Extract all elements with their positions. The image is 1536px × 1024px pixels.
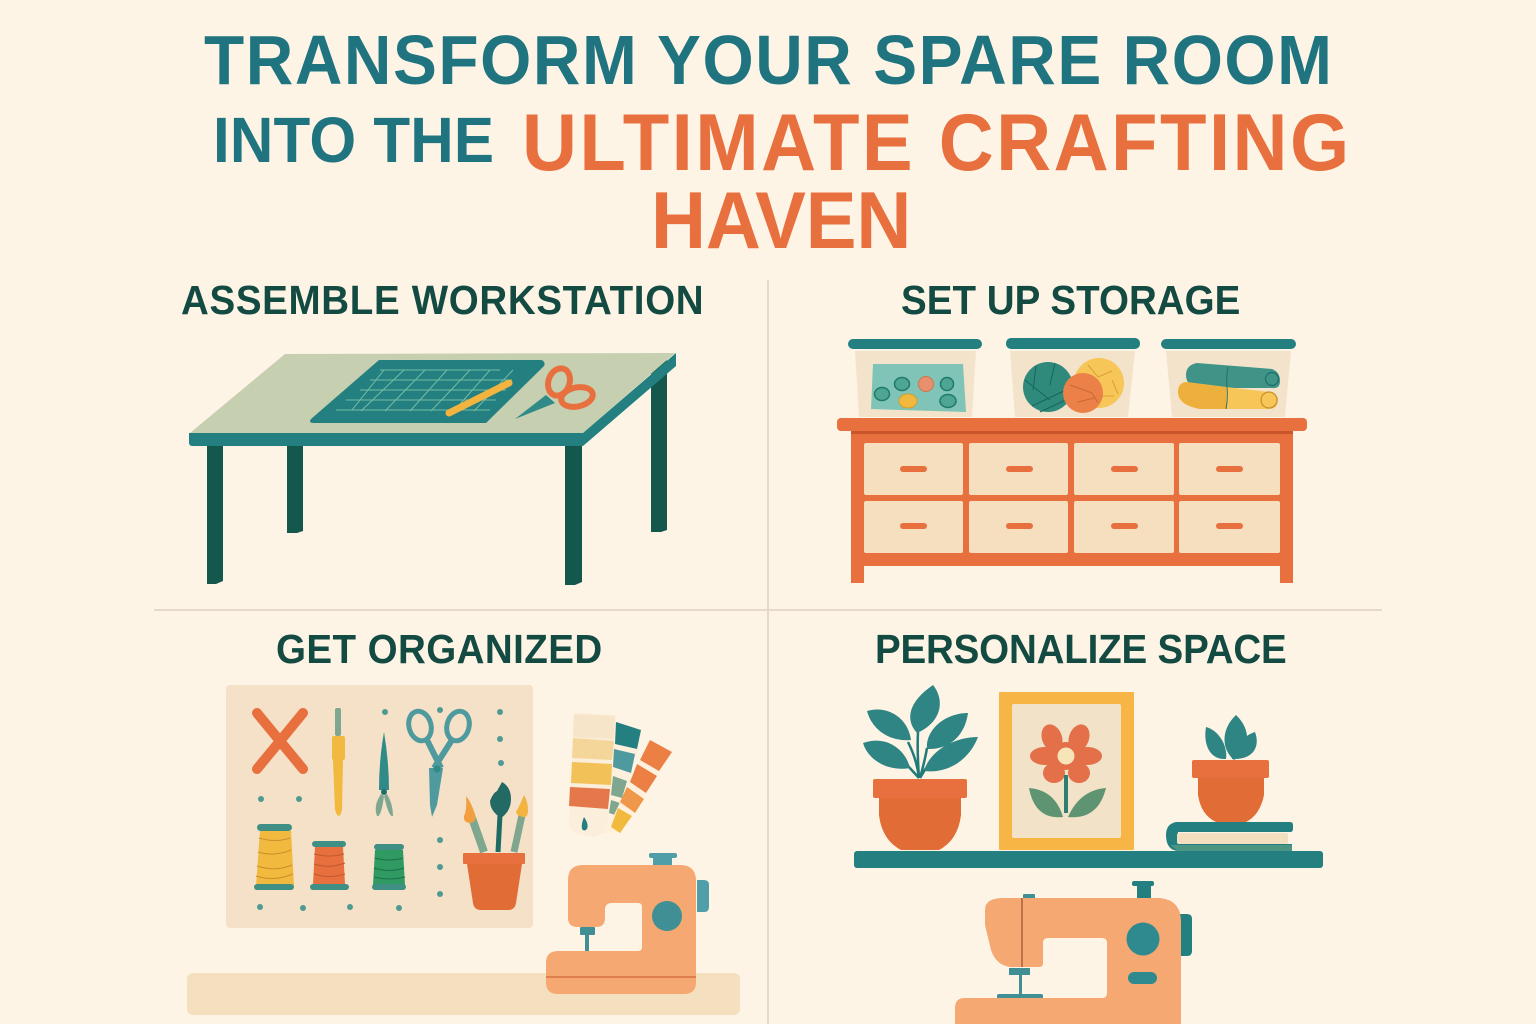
illustration: craft table: [189, 353, 676, 585]
panel: set up storage: [837, 278, 1307, 583]
heading: personalize space: PERSONALIZE SPACE: [875, 627, 1287, 672]
large scissors: [405, 709, 473, 817]
bin contents: rolled fabric: [1178, 363, 1280, 409]
title: TRANSFORM YOUR SPARE ROOM: [204, 22, 1332, 99]
bin contents: fabric and buttons: [871, 364, 966, 412]
panel: personalize space: [854, 627, 1323, 1024]
illustration: orange dresser: [837, 418, 1307, 583]
thread spools: [254, 824, 406, 890]
sewing machine: organized: [546, 853, 709, 994]
cutting mat: [310, 360, 545, 423]
panel: assemble workstation: [181, 278, 704, 585]
bin contents: yarn balls: [1023, 358, 1124, 413]
title: ULTIMATE CRAFTING: [522, 97, 1349, 188]
title: [204, 22, 1349, 266]
paint swatch fan: [569, 713, 672, 837]
awl tool: [332, 708, 345, 816]
brushes in pot: [463, 782, 528, 910]
panel: get organized: [187, 627, 740, 1015]
crossed sticks: [257, 713, 303, 769]
title: INTO THE: [213, 105, 494, 176]
wall shelf: [854, 851, 1323, 868]
scissors: [515, 365, 595, 419]
sewing machine: personalize: [955, 881, 1192, 1024]
title: HAVEN: [651, 175, 911, 266]
heading: get organized: GET ORGANIZED: [276, 627, 602, 672]
book stack: [1166, 822, 1293, 851]
workbench: [187, 973, 740, 1015]
heading: assemble workstation: ASSEMBLE WORKSTATION: [181, 278, 704, 323]
craft knife: [449, 383, 509, 413]
heading: set up storage: SET UP STORAGE: [901, 278, 1240, 323]
potted plant: large: [863, 685, 978, 850]
pegboard: [226, 685, 533, 928]
small shears: [376, 732, 393, 816]
framed flower picture: [999, 692, 1134, 850]
illustration: storage bins: [848, 338, 1296, 417]
potted plant: small: [1192, 715, 1269, 822]
